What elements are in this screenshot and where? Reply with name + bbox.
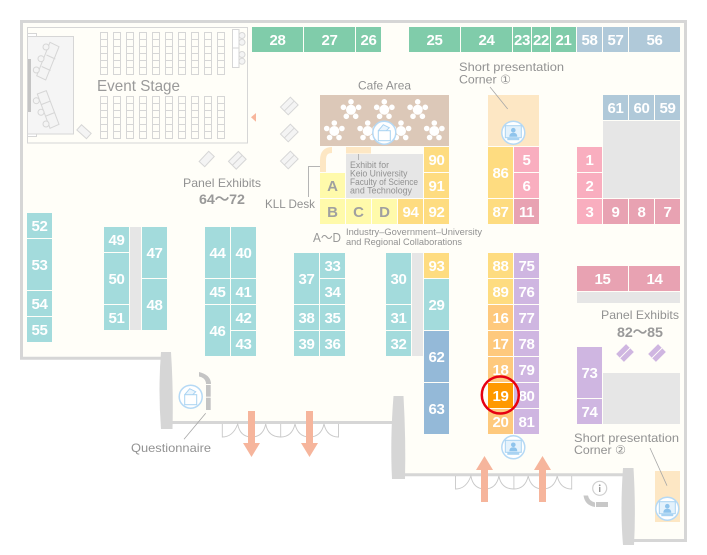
booth 55 <box>27 317 52 342</box>
label: Panel Exhibits 64-72: 64～72 <box>199 191 245 207</box>
grey strip under 15 and 14 <box>577 292 680 303</box>
booth 39 <box>294 331 319 356</box>
booth 14 <box>629 266 680 291</box>
booth 49 <box>104 227 129 252</box>
booth 89 <box>488 279 513 304</box>
booth 90: 90 <box>429 152 444 169</box>
pillar: right entrance <box>622 468 635 545</box>
booth A: A <box>327 178 338 195</box>
booth 24: 24 <box>479 32 495 49</box>
booth 33: 33 <box>325 258 340 275</box>
label: Short presentation Corner 2: Short presentation <box>574 431 679 445</box>
booth 63: 63 <box>429 401 444 418</box>
arrow: exit left <box>243 411 260 457</box>
grey strip centre <box>412 253 423 356</box>
label: KLL Desk: KLL Desk <box>265 197 316 211</box>
label: Panel Exhibits 64-72: Panel Exhibits <box>183 176 261 190</box>
booth 76: 76 <box>519 284 534 301</box>
booth 61: 61 <box>608 100 623 117</box>
booth 22 <box>532 27 550 52</box>
label: Short presentation Corner 1 <box>459 60 564 86</box>
label: Short presentation Corner 2: Corner ② <box>574 443 626 457</box>
label: Short presentation Corner 1: Short presentation <box>459 60 564 74</box>
heading: Event Stage: Event Stage <box>97 78 180 95</box>
booth 30: 30 <box>391 271 406 288</box>
booth 55: 55 <box>32 322 47 339</box>
booth 23 <box>513 27 531 52</box>
booth 78 <box>514 331 539 356</box>
booth 91: 91 <box>429 178 444 195</box>
booth D <box>372 199 397 224</box>
booth 45 <box>205 279 230 304</box>
booth 31 <box>386 305 411 330</box>
booth 19 highlighted: 19 <box>493 388 508 405</box>
booth 23: 23 <box>514 32 530 49</box>
arrow: entrance right <box>534 456 551 502</box>
booth 80: 80 <box>519 388 534 405</box>
label: A to D collaborations: Industry–Government–University <box>346 227 482 238</box>
booth 20: 20 <box>493 414 508 431</box>
booth 1 <box>577 147 602 172</box>
booth 32: 32 <box>391 336 406 353</box>
booth 73 <box>577 347 602 398</box>
booth 19 highlighted <box>488 383 513 408</box>
icon: triangle marker <box>251 113 256 122</box>
booth 37 <box>294 253 319 304</box>
label: Panel Exhibits 64-72 <box>183 176 261 207</box>
booth 60 <box>629 95 654 120</box>
booth 17: 17 <box>493 336 508 353</box>
booth 20 <box>488 409 513 434</box>
booth 45: 45 <box>210 284 225 301</box>
booth 79: 79 <box>519 362 534 379</box>
booth 25: 25 <box>427 32 442 49</box>
booth 59: 59 <box>660 100 675 117</box>
booth 52 <box>27 213 52 238</box>
booth 9 <box>603 199 628 224</box>
booth 47 <box>142 227 167 278</box>
pillar: centre entrance <box>391 396 405 479</box>
booth 16 <box>488 305 513 330</box>
booth 74: 74 <box>582 404 598 421</box>
booth 27 <box>304 27 355 52</box>
booth 1: 1 <box>586 152 594 169</box>
booth 54 <box>27 291 52 316</box>
booth 43 <box>231 331 256 356</box>
booth 34 <box>320 279 345 304</box>
booth 89: 89 <box>493 284 508 301</box>
booth 28 <box>252 27 303 52</box>
booth 15: 15 <box>595 271 610 288</box>
booth 26: 26 <box>361 32 376 49</box>
booth 46: 46 <box>210 323 225 340</box>
booth 3: 3 <box>586 204 594 221</box>
highlight circle around booth 19 <box>482 376 519 414</box>
booth 51: 51 <box>109 310 124 327</box>
booth 8: 8 <box>638 204 646 221</box>
booth 59 <box>655 95 680 120</box>
booth 34: 34 <box>325 284 341 301</box>
booth 88: 88 <box>493 258 508 275</box>
booth 76 <box>514 279 539 304</box>
booth 51 <box>104 305 129 330</box>
booth 17 <box>488 331 513 356</box>
booth 7 <box>655 199 680 224</box>
booth 32 <box>386 331 411 356</box>
KLL desk <box>308 150 332 197</box>
icon: information <box>593 481 607 495</box>
booth 11: 11 <box>519 204 534 221</box>
booth 53 <box>27 239 52 290</box>
booth 31: 31 <box>391 310 406 327</box>
booth 28: 28 <box>270 32 285 49</box>
booth 80 <box>514 383 539 408</box>
panel exhibits 64 to 72 <box>199 97 298 169</box>
label: Short presentation Corner 1: Corner ① <box>459 72 511 86</box>
booth C <box>346 199 371 224</box>
booth 41 <box>231 279 256 304</box>
booth 39: 39 <box>299 336 314 353</box>
information desk <box>584 496 608 507</box>
booth 58: 58 <box>582 32 597 49</box>
booth 91 <box>424 173 449 198</box>
panel: Keio University exhibit: Faculty of Science <box>350 177 418 187</box>
icon: screen corner 2 <box>656 497 679 520</box>
booth 75: 75 <box>519 258 534 275</box>
booth 21 <box>551 27 576 52</box>
booth 7: 7 <box>664 204 672 221</box>
booth 53: 53 <box>32 257 47 274</box>
booth 25 <box>409 27 460 52</box>
booth 49: 49 <box>109 232 124 249</box>
booth 62: 62 <box>429 349 444 366</box>
booth 88 <box>488 253 513 278</box>
booth 86 <box>488 147 513 198</box>
booth 74 <box>577 399 602 424</box>
leader line: questionnaire <box>184 413 206 439</box>
booth 73: 73 <box>582 365 597 382</box>
booth 86: 86 <box>493 165 508 182</box>
booth 78: 78 <box>519 336 534 353</box>
booth 29: 29 <box>429 297 444 314</box>
booth 87: 87 <box>493 204 508 221</box>
panel: short presentation corner 1 <box>488 95 539 146</box>
booth C: C <box>353 204 364 221</box>
booth B <box>320 199 345 224</box>
booth 14: 14 <box>647 271 663 288</box>
booth 44 <box>205 227 230 278</box>
booth 46 <box>205 305 230 356</box>
panel: grey area upper right <box>603 121 680 198</box>
panel: Keio University exhibit: and Technology <box>350 186 412 196</box>
booth 38 <box>294 305 319 330</box>
arrow: exit right <box>301 411 318 457</box>
booth 81 <box>514 409 539 434</box>
booth 48: 48 <box>147 297 162 314</box>
panel: cafe area <box>320 95 449 146</box>
booth 57 <box>603 27 628 52</box>
booth 44: 44 <box>210 245 226 262</box>
booth 92 <box>424 199 449 224</box>
questionnaire desk <box>199 372 211 410</box>
booth 94 <box>398 199 423 224</box>
grey strip <box>130 227 141 330</box>
booth 42 <box>231 305 256 330</box>
booth 48 <box>142 279 167 330</box>
leader line: corner 1 <box>490 87 508 109</box>
booth D: D <box>379 204 390 221</box>
booth 3 <box>577 199 602 224</box>
icon: questionnaire <box>179 385 202 408</box>
booth 6 <box>514 173 539 198</box>
booth 42: 42 <box>236 310 251 327</box>
booth 35 <box>320 305 345 330</box>
booth 8 <box>629 199 654 224</box>
booth 61 <box>603 95 628 120</box>
booth 30 <box>386 253 411 304</box>
booth 41: 41 <box>236 284 251 301</box>
booth 77: 77 <box>519 310 534 327</box>
label: Cafe Area: Cafe Area <box>358 78 411 92</box>
label: Panel Exhibits 82-85: Panel Exhibits <box>601 308 679 322</box>
label: Panel Exhibits 82-85 <box>601 308 679 340</box>
label: A to D collaborations: A～D <box>313 230 341 245</box>
booth 33 <box>320 253 345 278</box>
icon: screen corner 1 <box>502 121 525 144</box>
arrow: entrance left <box>476 456 493 502</box>
label: Questionnaire: Questionnaire <box>131 441 211 455</box>
grey area lower right <box>603 373 680 424</box>
booth 2: 2 <box>586 178 594 195</box>
booth B: B <box>327 204 338 221</box>
booth 35: 35 <box>325 310 340 327</box>
booth 77 <box>514 305 539 330</box>
booth 52: 52 <box>32 218 47 235</box>
event stage area <box>28 28 248 143</box>
booth 29 <box>424 279 449 330</box>
booth 79 <box>514 357 539 382</box>
booth 26 <box>356 27 381 52</box>
booth 50: 50 <box>109 271 124 288</box>
booth 18: 18 <box>493 362 508 379</box>
booth 24 <box>461 27 512 52</box>
booth 92: 92 <box>429 204 444 221</box>
label: Panel Exhibits 82-85: 82～85 <box>617 324 663 340</box>
booth 43: 43 <box>236 336 251 353</box>
icon: cafe questionnaire <box>373 121 396 144</box>
booth 90 <box>424 147 449 172</box>
booth 37: 37 <box>299 271 314 288</box>
booth 93: 93 <box>429 258 444 275</box>
booth 36: 36 <box>325 336 340 353</box>
booth 50 <box>104 253 129 304</box>
booth 16: 16 <box>493 310 508 327</box>
booth 40 <box>231 227 256 278</box>
booth 62 <box>424 331 449 382</box>
label: A to D collaborations <box>313 227 482 248</box>
booth 18 <box>488 357 513 382</box>
booth 40: 40 <box>236 245 251 262</box>
booth 56 <box>629 27 680 52</box>
booth 57: 57 <box>608 32 623 49</box>
panel: short presentation corner 2 <box>655 471 680 522</box>
doors: right entrance <box>456 476 572 489</box>
booth 2 <box>577 173 602 198</box>
booth 75 <box>514 253 539 278</box>
panel: Keio University exhibit: Keio University <box>350 168 408 178</box>
booth 58 <box>577 27 602 52</box>
booth 93 <box>424 253 449 278</box>
booth 94: 94 <box>403 204 419 221</box>
booth 56: 56 <box>647 32 662 49</box>
booth 81: 81 <box>519 414 534 431</box>
panel: Keio University exhibit: Exhibit for <box>350 160 389 170</box>
label: Short presentation Corner 2 <box>574 431 679 457</box>
booth 87 <box>488 199 513 224</box>
panel exhibits 82 to 85 <box>616 344 666 362</box>
booth 36 <box>320 331 345 356</box>
booth 9: 9 <box>612 204 620 221</box>
booth 5: 5 <box>523 152 531 169</box>
booth 63 <box>424 383 449 434</box>
label: A to D collaborations: and Regional Collaborations <box>346 237 462 248</box>
booth 6: 6 <box>523 178 531 195</box>
icon: screen centre <box>502 436 525 459</box>
booth 60: 60 <box>634 100 649 117</box>
booth 47: 47 <box>147 245 162 262</box>
panel: Keio University exhibit <box>346 147 423 198</box>
booth 21: 21 <box>556 32 571 49</box>
booth 27: 27 <box>322 32 337 49</box>
booth 38: 38 <box>299 310 314 327</box>
booth 15 <box>577 266 628 291</box>
pillar: left entrance <box>160 352 173 429</box>
leader line: corner 2 <box>650 448 667 486</box>
booth 5 <box>514 147 539 172</box>
booth 54: 54 <box>32 296 48 313</box>
doors: left entrance <box>222 424 338 437</box>
booth 22: 22 <box>533 32 549 49</box>
booth 11 <box>514 199 539 224</box>
booth A <box>320 173 345 198</box>
